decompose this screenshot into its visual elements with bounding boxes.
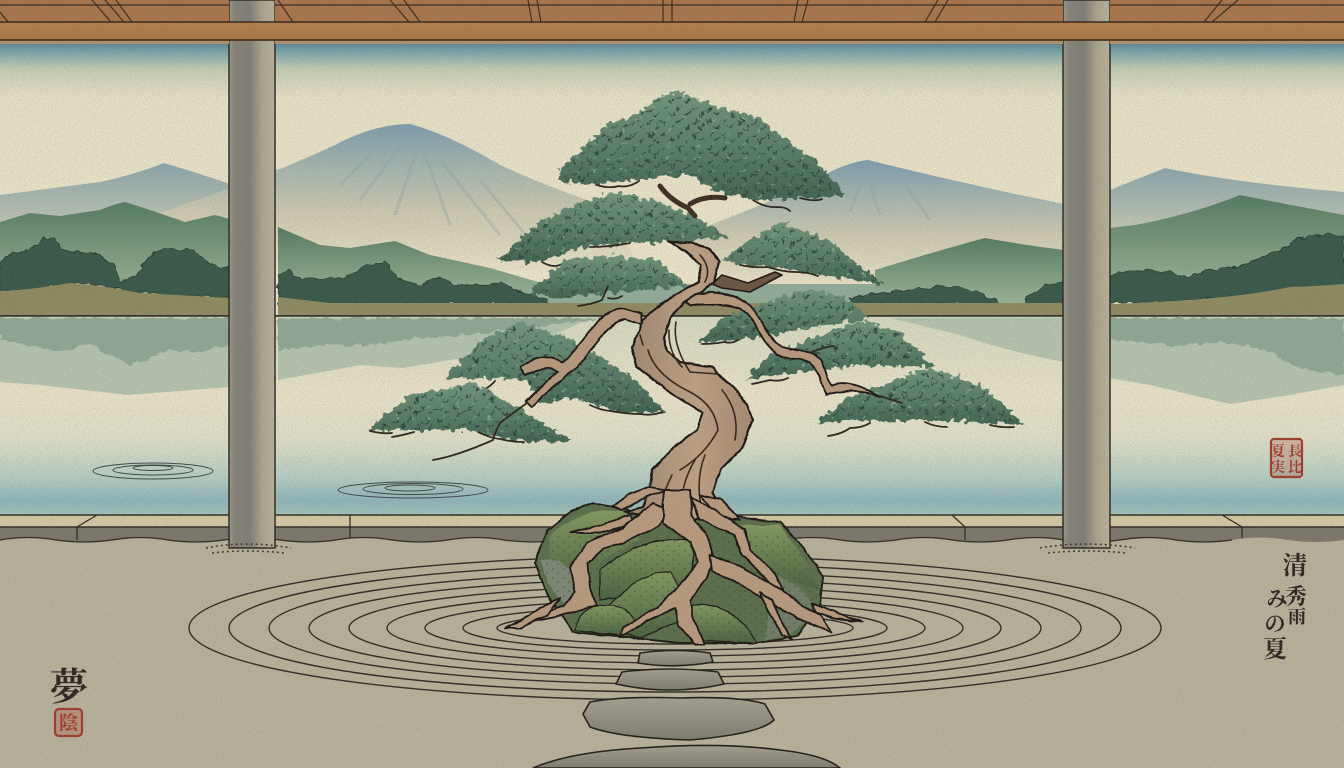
left calligraphy: 夢: [50, 667, 88, 709]
pale reflections: [0, 318, 1344, 404]
ripple centre: [338, 482, 488, 498]
right red seal: 実: [1271, 459, 1285, 476]
root: left thick: [510, 503, 670, 627]
left pillar: [206, 0, 291, 553]
moss rock: [535, 503, 823, 643]
dark reflections: [0, 318, 1344, 375]
right calligraphy: の: [1264, 612, 1286, 636]
root: rear right: [690, 497, 783, 590]
right branch twigs: [812, 346, 902, 403]
pad: far right: [817, 367, 1025, 436]
far mountains: [0, 124, 1344, 290]
pad: upper right: [723, 222, 885, 285]
root: central: [620, 490, 714, 645]
pad: crown: [557, 91, 845, 211]
roof rafters: [0, 0, 1344, 22]
root: back right: [700, 495, 740, 520]
right pillar: [1040, 0, 1135, 553]
stone curb: [0, 515, 1344, 543]
raked gravel rings: [189, 556, 1161, 700]
right calligraphy: 夏: [1263, 636, 1287, 663]
bonsai trunk: [625, 241, 753, 522]
stepping stone 4: [533, 745, 840, 768]
root: far left tail: [505, 598, 560, 628]
right branch: [680, 293, 880, 396]
pad: middle right: [697, 289, 870, 344]
right red seal: 夏: [1271, 443, 1285, 460]
pad: left lower: [367, 383, 570, 443]
green hills: [0, 195, 1344, 305]
right calligraphy: み: [1266, 587, 1288, 611]
right red seal: 比: [1288, 460, 1302, 476]
root: far right tail: [812, 603, 862, 622]
stepping stone 3: [583, 698, 774, 740]
stepping stone 2: [616, 669, 724, 690]
left branch twigs: [433, 403, 527, 460]
right red seal: 長: [1288, 443, 1302, 460]
crown branch: [660, 186, 725, 216]
right calligraphy: 雨: [1288, 607, 1306, 627]
pad: middle left: [530, 256, 688, 306]
foliage pads: [367, 91, 1025, 443]
upper right branch: [712, 272, 782, 292]
branches: [433, 186, 902, 460]
right calligraphy: 清: [1282, 552, 1308, 580]
left red seal: 陰: [59, 712, 79, 734]
sky: [0, 41, 1344, 321]
root: back left: [613, 487, 665, 510]
pad: lower middle right: [745, 320, 935, 384]
stepping stone 1: [638, 650, 713, 666]
main beam: [0, 22, 1344, 44]
pad: upper left: [497, 192, 730, 266]
root: right minor: [760, 592, 792, 640]
pad: left upper: [445, 322, 665, 415]
gravel ground: [0, 538, 1344, 768]
left red seal: [55, 709, 82, 736]
left branch: [520, 309, 642, 407]
ripple left: [93, 463, 213, 479]
right calligraphy: [1263, 552, 1308, 663]
right red seal: [1271, 439, 1302, 477]
root: upper left thin: [570, 515, 635, 533]
root: right long: [710, 555, 832, 633]
exposed roots: [505, 487, 862, 645]
lake: [0, 315, 1344, 515]
far shore: [0, 283, 1344, 316]
distant tree lines: [0, 235, 1344, 306]
right calligraphy: 秀: [1285, 584, 1307, 609]
